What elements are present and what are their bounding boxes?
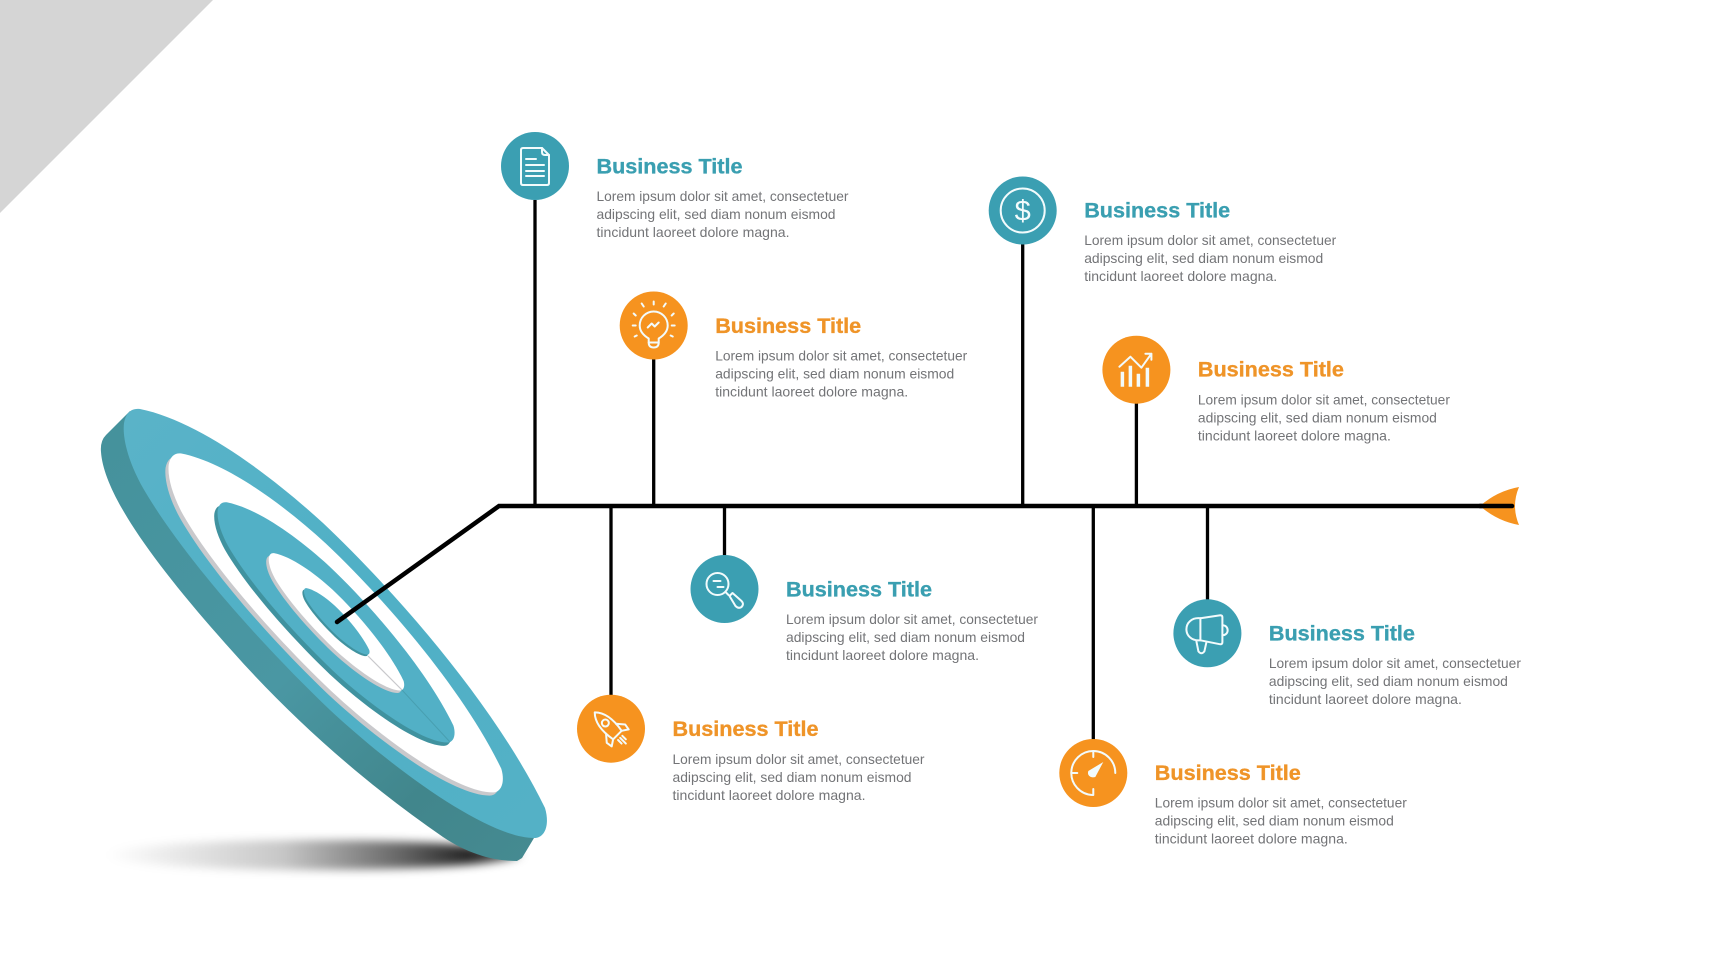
heading: Business Title xyxy=(1084,198,1230,222)
target white ring xyxy=(165,453,503,796)
body text xyxy=(1084,233,1337,284)
body text: Lorem ipsum dolor sit amet, consectetuer xyxy=(715,349,968,364)
heading: Business Title xyxy=(715,314,861,338)
arrow shaft end xyxy=(1480,504,1512,508)
target shadow xyxy=(107,840,517,870)
icon: megaphone xyxy=(1173,599,1241,667)
panel: item 7 performance xyxy=(1059,739,1407,847)
body text: tincidunt laoreet dolore magna. xyxy=(1269,692,1462,707)
body text: Lorem ipsum dolor sit amet, consectetuer xyxy=(1084,233,1337,248)
body text: Lorem ipsum dolor sit amet, consectetuer xyxy=(596,189,849,204)
panel: item 8 marketing xyxy=(1173,599,1521,707)
body text: adipscing elit, sed diam nonum eismod xyxy=(1198,410,1437,425)
icon: growth chart xyxy=(1102,336,1170,404)
corner triangle xyxy=(0,0,213,213)
heading: Business Title xyxy=(1155,761,1301,785)
target inner white ring xyxy=(266,553,404,693)
panel: item 4 growth xyxy=(1102,336,1450,443)
target board xyxy=(101,409,547,861)
icon: rocket xyxy=(577,695,645,763)
body text xyxy=(1269,656,1521,707)
body text xyxy=(672,752,925,803)
icon: dollar coin xyxy=(989,176,1057,244)
icon: document xyxy=(501,132,569,200)
target outer ring xyxy=(124,409,547,838)
heading: Business Title xyxy=(672,717,819,741)
body text: tincidunt laoreet dolore magna. xyxy=(596,225,790,240)
body text xyxy=(1198,392,1450,443)
arrow fletching xyxy=(1480,487,1519,525)
heading: Business Title xyxy=(1198,358,1344,382)
heading: Business Title xyxy=(596,154,743,178)
target bullseye xyxy=(302,588,370,656)
body text: adipscing elit, sed diam nonum eismod xyxy=(596,207,836,222)
panel: item 1 document xyxy=(501,132,849,240)
heading: Business Title xyxy=(786,578,932,602)
body text: tincidunt laoreet dolore magna. xyxy=(672,788,866,803)
icon: gauge xyxy=(1059,739,1127,807)
body text: tincidunt laoreet dolore magna. xyxy=(1084,269,1277,284)
body text xyxy=(1155,796,1407,847)
body text: Lorem ipsum dolor sit amet, consectetuer xyxy=(786,612,1038,627)
body text: Lorem ipsum dolor sit amet, consectetuer xyxy=(1269,656,1521,671)
body text: Lorem ipsum dolor sit amet, consectetuer xyxy=(672,752,925,767)
connector stems xyxy=(535,200,1208,740)
target middle ring xyxy=(214,502,455,746)
body text: adipscing elit, sed diam nonum eismod xyxy=(715,367,954,382)
body text: tincidunt laoreet dolore magna. xyxy=(786,648,979,663)
body text: adipscing elit, sed diam nonum eismod xyxy=(672,770,912,785)
heading: Business Title xyxy=(1269,621,1415,645)
target side wall xyxy=(101,411,534,861)
panel: item 6 research xyxy=(690,555,1038,663)
panel: item 3 finance xyxy=(989,176,1337,284)
panel: item 5 launch xyxy=(577,695,925,803)
icon: light bulb xyxy=(620,292,688,360)
icon: magnifier xyxy=(690,555,758,623)
body text: tincidunt laoreet dolore magna. xyxy=(715,385,908,400)
body text: Lorem ipsum dolor sit amet, consectetuer xyxy=(1198,392,1450,407)
body text: adipscing elit, sed diam nonum eismod xyxy=(1155,814,1394,829)
panel: item 2 idea xyxy=(620,292,968,400)
body text: adipscing elit, sed diam nonum eismod xyxy=(786,630,1025,645)
body text: adipscing elit, sed diam nonum eismod xyxy=(1269,674,1508,689)
body text xyxy=(715,349,968,400)
body text: tincidunt laoreet dolore magna. xyxy=(1198,428,1391,443)
body text xyxy=(596,189,849,240)
body text xyxy=(786,612,1038,663)
body text: adipscing elit, sed diam nonum eismod xyxy=(1084,251,1323,266)
timeline spine xyxy=(337,506,1512,622)
body text: Lorem ipsum dolor sit amet, consectetuer xyxy=(1155,796,1407,811)
icon: dollar coin: $ xyxy=(1015,196,1031,228)
body text: tincidunt laoreet dolore magna. xyxy=(1155,832,1348,847)
